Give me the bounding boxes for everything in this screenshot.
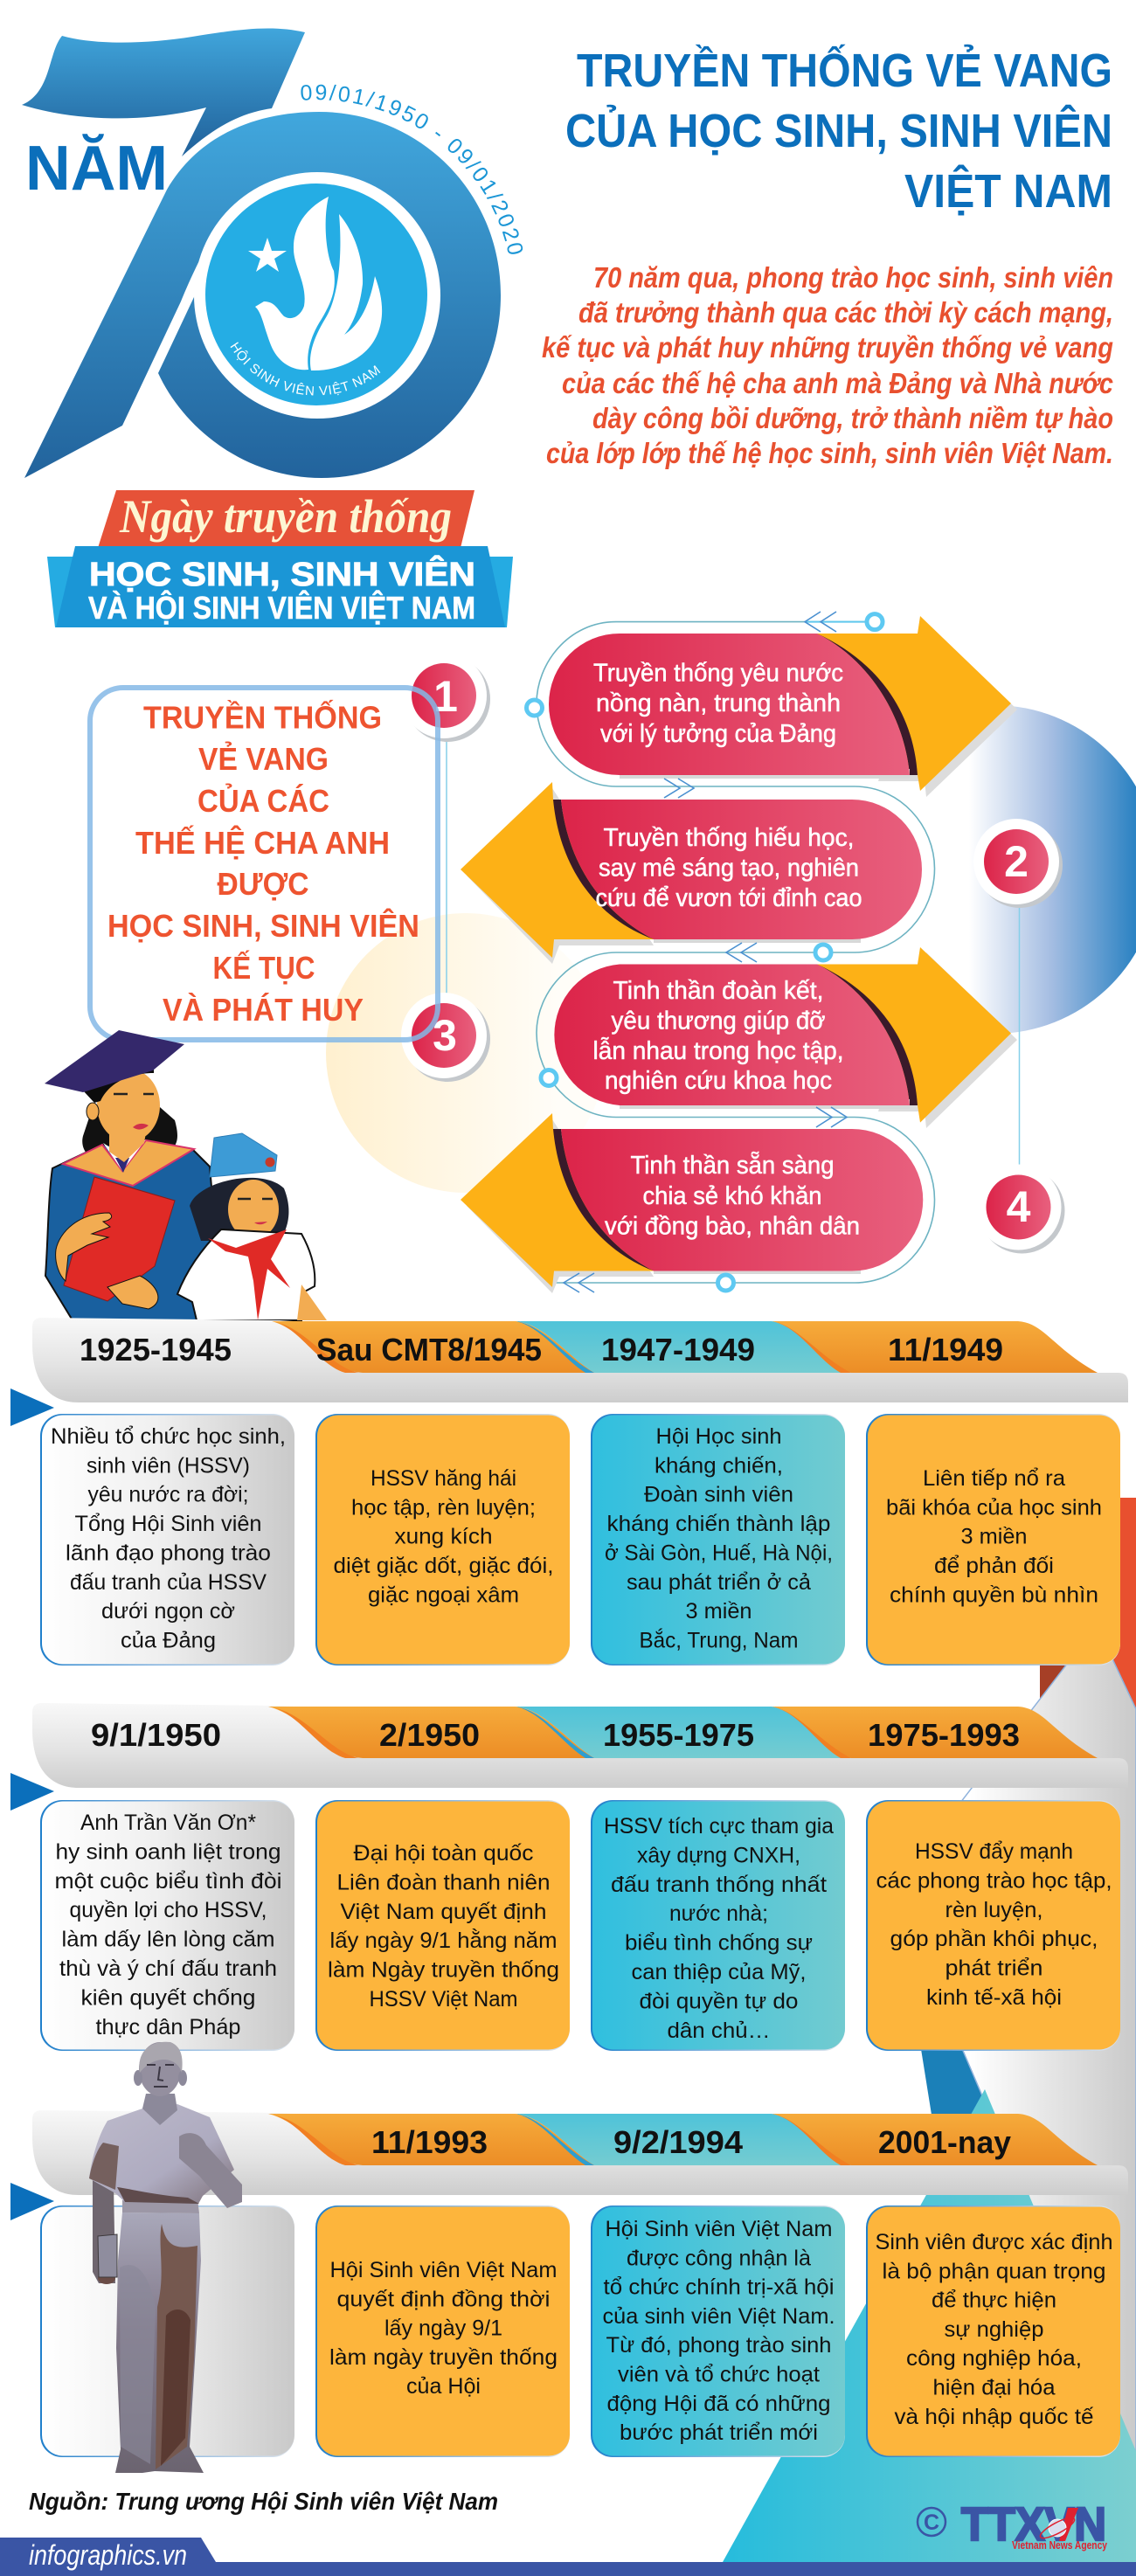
statue of Trần Văn Ơn <box>89 2042 242 2473</box>
year labels: Sau CMT8/1945 <box>316 1332 542 1368</box>
year labels: 2/1950 <box>379 1717 480 1753</box>
pill <box>561 800 922 939</box>
digit 0 ring with 7 diagonal <box>24 112 501 478</box>
tab: orange 3 <box>772 1707 1098 1758</box>
card: 9/2/1994: Từ đó, phong trào sinh <box>606 2333 832 2358</box>
card: 1975-1993: kinh tế-xã hội <box>926 1985 1062 2010</box>
card: 1947-1949: 3 miền <box>685 1599 752 1624</box>
pill text <box>593 659 843 748</box>
card: 1955-1975: biểu tình chống sự <box>625 1931 813 1956</box>
neck <box>142 2094 177 2125</box>
text box: traditions heading: CỦA CÁC <box>197 782 329 819</box>
graduate neck and face <box>109 1127 147 1162</box>
red book <box>64 1177 175 1301</box>
flow outline <box>537 622 935 1283</box>
tab edge slivers <box>268 2114 851 2165</box>
heading box outline <box>90 688 438 1040</box>
card: after August Revolution: giặc ngoại xâm <box>368 1582 519 1607</box>
pale circle behind heading box <box>326 913 606 1193</box>
tab: orange 3 <box>772 2114 1098 2165</box>
icon: white star <box>248 238 287 272</box>
card: 2/1950: Liên đoàn thanh niên <box>337 1870 551 1894</box>
card: 1925-1945: yêu nước ra đời; <box>87 1483 248 1507</box>
card: 2/1950: làm Ngày truyền thống <box>328 1958 559 1983</box>
arrow row 4 <box>461 1113 923 1293</box>
shirt <box>89 2104 234 2204</box>
card: 9/2/1994: viên và tổ chức hoạt <box>618 2363 820 2387</box>
text box: traditions heading: VẺ VANG <box>198 741 329 777</box>
hands <box>56 1213 158 1309</box>
card: 1925-1945: dưới ngọn cờ <box>101 1599 235 1624</box>
card: after August Revolution: diệt giặc dốt, giặc đói, <box>334 1554 554 1578</box>
text box: traditions heading: TRUYỀN THỐNG <box>143 699 382 736</box>
card: portrait background <box>40 2206 294 2457</box>
year labels: 1975-1993 <box>868 1717 1020 1753</box>
arrow row 1 <box>549 616 1017 797</box>
card: 9/1/1950: thù và ý chí đấu tranh <box>59 1956 277 1981</box>
pill shadow <box>620 1099 910 1109</box>
card: 2001-nay: để thực hiện <box>932 2289 1056 2313</box>
ribbon line 2: VÀ HỘI SINH VIÊN VIỆT NAM <box>88 589 475 626</box>
forearm and hand <box>179 2133 242 2208</box>
card: 9/1/1950: hy sinh oanh liệt trong <box>56 1839 281 1864</box>
pill <box>554 965 910 1105</box>
arrow shadow <box>878 622 1017 797</box>
pill text: Truyền thống yêu nước <box>593 659 843 687</box>
icon: dove <box>255 197 335 370</box>
tab edge slivers <box>272 1321 851 1373</box>
year labels: 1955-1975 <box>603 1717 754 1753</box>
card: 11/1993: của Hội <box>406 2374 481 2399</box>
badge 4: 4 <box>1007 1182 1031 1231</box>
card: after August Revolution: học tập, rèn luyện; <box>351 1495 536 1520</box>
text box: traditions heading: KẾ TỤC <box>213 950 315 986</box>
pill text <box>596 824 862 912</box>
pill text: cứu để vươn tới đỉnh cao <box>596 884 862 912</box>
card: 1975-1993: góp phần khôi phục, <box>890 1927 1098 1951</box>
marker arrow 2 <box>10 1773 54 1811</box>
dark crescent <box>553 800 654 939</box>
card: after August Revolution <box>315 1414 570 1665</box>
pill text: chia sẻ khó khăn <box>643 1182 821 1210</box>
card: after August Revolution: HSSV hăng hái <box>371 1466 516 1491</box>
card: 9/1/1950: quyền lợi cho HSSV, <box>70 1898 267 1922</box>
year labels: 9/1/1950 <box>91 1717 221 1753</box>
arrow shadow <box>878 952 1017 1128</box>
copyright mark <box>918 2508 946 2536</box>
gown <box>45 1145 223 1320</box>
hair <box>139 2042 183 2073</box>
card: 9/2/1994: Hội Sinh viên Việt Nam <box>605 2217 832 2241</box>
card: 11/1949: chính quyền bù nhìn <box>890 1582 1098 1607</box>
card: 9/1/1950: làm dấy lên lòng căm <box>61 1928 274 1952</box>
pioneer shirt <box>177 1229 315 1320</box>
card: 1975-1993: các phong trào học tập, <box>876 1868 1112 1893</box>
card: 1947-1949: sau phát triển ở cả <box>627 1570 811 1595</box>
card: 11/1949: Liên tiếp nổ ra <box>923 1466 1065 1491</box>
text box: traditions heading: THẾ HỆ CHA ANH <box>135 824 390 861</box>
year labels: 1947-1949 <box>601 1332 755 1368</box>
timeline band 2 <box>32 1703 1128 1788</box>
dark crescent <box>817 965 918 1105</box>
pill <box>561 1129 923 1271</box>
card: 2001-nay: sự nghiệp <box>944 2317 1043 2342</box>
badge 2: 2 <box>1004 837 1029 886</box>
yellow arrow <box>461 1113 654 1287</box>
card: 1925-1945: Tổng Hội Sinh viên <box>75 1512 262 1536</box>
pioneer cap <box>210 1133 277 1177</box>
pill text: nghiên cứu khoa học <box>605 1067 832 1095</box>
shirt collar and tie <box>103 1139 146 1171</box>
illustration: graduate and pioneer <box>45 1030 327 1320</box>
arrow row 3 <box>554 947 1017 1128</box>
card: 11/1993: Hội Sinh viên Việt Nam <box>330 2258 558 2282</box>
text box: traditions heading: HỌC SINH, SINH VIÊN <box>107 907 419 944</box>
card: 1955-1975: HSSV tích cực tham gia <box>604 1814 834 1839</box>
card: 9/1/1950 <box>40 1800 294 2051</box>
footer band <box>0 2538 1136 2576</box>
icon: flame feathers <box>310 214 382 370</box>
yellow arrow <box>461 782 654 958</box>
text box: traditions heading <box>107 699 419 1028</box>
card: 11/1993: quyết định đồng thời <box>337 2287 551 2311</box>
card: 2001-nay: Sinh viên được xác định <box>876 2230 1113 2254</box>
badge 3: 3 <box>433 1011 457 1060</box>
graduate hair back <box>82 1101 177 1160</box>
card: 9/2/1994: của sinh viên Việt Nam. <box>603 2304 835 2329</box>
logo: 70 years emblem <box>22 28 523 478</box>
digit 7 top <box>22 29 305 156</box>
card: 1947-1949: Đoàn sinh viên <box>644 1483 793 1507</box>
card: 9/1/1950: Anh Trần Văn Ơn* <box>80 1811 256 1835</box>
anniversary dates: 09/01/1950 - 09/01/2020 <box>301 84 523 254</box>
card: 1955-1975: can thiệp của Mỹ, <box>631 1960 806 1984</box>
tab: orange 1 <box>272 1321 594 1373</box>
ears <box>134 2070 187 2086</box>
card: 11/1949 <box>866 1414 1120 1665</box>
timeline cards row 1 <box>40 1414 1120 1665</box>
card: 2/1950: lấy ngày 9/1 hằng năm <box>330 1928 558 1953</box>
text box: traditions heading: ĐƯỢC <box>217 866 309 902</box>
ribbon: tradition day <box>47 490 513 627</box>
badge 1: 1 <box>433 672 458 721</box>
card: 2/1950: Đại hội toàn quốc <box>353 1841 533 1866</box>
connector lines <box>447 737 1019 1165</box>
card: 9/1/1950: một cuộc biểu tình đòi <box>54 1869 281 1894</box>
emblem curved name: HỘI SINH VIÊN VIỆT NAM <box>231 342 381 395</box>
yellow arrow <box>817 616 1011 791</box>
card: 11/1993 <box>315 2206 570 2457</box>
card: 1975-1993 <box>866 1800 1120 2051</box>
timeline cards row 2 <box>40 1800 1120 2051</box>
pill <box>549 634 910 775</box>
card: 1925-1945: sinh viên (HSSV) <box>87 1453 250 1478</box>
card: 1947-1949: kháng chiến thành lập <box>606 1512 830 1536</box>
source line: Nguồn: Trung ương Hội Sinh viên Việt Nam <box>29 2488 498 2515</box>
card: 2001-nay: và hội nhập quốc tế <box>895 2405 1094 2429</box>
title <box>565 45 1112 218</box>
white ring <box>194 172 440 419</box>
graduate hair <box>83 1053 154 1103</box>
graduation cap <box>45 1030 184 1092</box>
timeline band 1 <box>32 1318 1128 1402</box>
hand at book <box>98 2272 115 2284</box>
tab: orange 1 <box>268 2114 594 2165</box>
ribbon orange tab <box>98 490 474 548</box>
card: 2/1950: HSSV Việt Nam <box>369 1987 517 2012</box>
pill shadow <box>654 1266 861 1274</box>
card: 9/1/1950: kiên quyết chống <box>80 1985 255 2010</box>
card: 2/1950 <box>315 1800 570 2051</box>
head <box>139 2042 181 2096</box>
marker arrow 1 <box>10 1388 54 1426</box>
card: 9/2/1994: bước phát triển mới <box>620 2420 818 2445</box>
copyright mark: C <box>924 2510 939 2535</box>
background shapes <box>723 1498 1136 2562</box>
card: 11/1949: bãi khóa của học sinh <box>886 1495 1102 1520</box>
text box: traditions heading: VÀ PHÁT HUY <box>163 992 364 1028</box>
card: 1955-1975: dân chủ… <box>668 2019 771 2043</box>
card: 2/1950: Việt Nam quyết định <box>341 1900 547 1924</box>
card: 1975-1993: phát triển <box>946 1956 1043 1981</box>
card: 11/1949: để phản đối <box>934 1554 1054 1578</box>
year labels: 11/1949 <box>888 1332 1003 1368</box>
year labels: 9/2/1994 <box>613 2124 743 2160</box>
card: 1955-1975: nước nhà; <box>669 1901 768 1926</box>
trouser shading <box>120 2224 197 2469</box>
card: 1925-1945 <box>40 1414 294 1665</box>
card: 1947-1949: kháng chiến, <box>655 1453 783 1478</box>
arrow shadow <box>467 788 654 964</box>
ribbon blue front <box>56 546 505 627</box>
card: 1955-1975: xây dựng CNXH, <box>637 1843 800 1867</box>
pioneer hair <box>190 1178 288 1241</box>
card: 1925-1945: Nhiều tổ chức học sinh, <box>51 1424 286 1449</box>
card: 2001-nay: công nghiệp hóa, <box>906 2346 1082 2371</box>
card: 1955-1975: đấu tranh thống nhất <box>611 1873 827 1897</box>
card: 1925-1945: lãnh đạo phong trào <box>66 1541 271 1566</box>
pill shadow <box>654 935 861 943</box>
card: 1947-1949: ở Sài Gòn, Huế, Hà Nội, <box>605 1541 833 1566</box>
card: 9/1/1950: thực dân Pháp <box>96 2015 241 2039</box>
dark crescent <box>817 634 918 775</box>
trousers <box>115 2212 204 2473</box>
shirt waist shadow <box>117 2187 199 2204</box>
year labels: 1925-1945 <box>80 1332 232 1368</box>
card: 1925-1945: đấu tranh của HSSV <box>70 1570 267 1595</box>
card: 11/1993: lấy ngày 9/1 <box>384 2316 502 2341</box>
card: 1955-1975 <box>591 1800 845 2051</box>
card: 1947-1949: Hội Học sinh <box>655 1424 781 1449</box>
footer site name: infographics.vn <box>29 2539 187 2571</box>
agency wordmark: TTXVN <box>961 2498 1106 2551</box>
arrow row 2 <box>461 782 922 964</box>
logo: TTXVN <box>918 2498 1108 2552</box>
dark crescent <box>553 1129 654 1271</box>
year labels <box>91 1717 1020 1753</box>
card: 1925-1945: của Đảng <box>121 1629 216 1653</box>
badge 1 <box>401 653 490 742</box>
ribbon script heading: Ngày truyền thống <box>119 490 452 543</box>
tab: orange 3 <box>772 1321 1098 1373</box>
agency tagline: Vietnam News Agency <box>1012 2538 1108 2552</box>
ribbon line 1: HỌC SINH, SINH VIÊN <box>89 555 475 593</box>
pioneer face <box>228 1180 279 1239</box>
pill text: nồng nàn, trung thành <box>596 689 841 717</box>
timeline cards row 3 <box>40 2206 1120 2457</box>
hood collar <box>63 1140 194 1186</box>
card: 1975-1993: HSSV đẩy mạnh <box>915 1839 1073 1864</box>
arrow shadow <box>467 1119 654 1293</box>
pill text: với đồng bào, nhân dân <box>605 1213 860 1241</box>
orbit <box>1038 2514 1077 2542</box>
pill text: say mê sáng tạo, nghiên <box>599 855 859 883</box>
red V stroke <box>1059 2508 1078 2541</box>
intro paragraph <box>542 261 1113 469</box>
tab: teal <box>516 1707 851 1758</box>
pill text: lẫn nhau trong học tập, <box>592 1036 844 1065</box>
card: 9/2/1994: được công nhận là <box>627 2246 811 2270</box>
belt <box>122 2199 199 2213</box>
pioneer arm <box>297 1285 327 1320</box>
year labels <box>371 2124 1011 2160</box>
card: 9/2/1994 <box>591 2206 845 2457</box>
card: 11/1993: làm ngày truyền thống <box>329 2345 558 2370</box>
pill text: với lý tưởng của Đảng <box>600 720 836 748</box>
card: 1975-1993: rèn luyện, <box>946 1898 1043 1922</box>
pioneer face details <box>238 1199 273 1224</box>
blue disc <box>205 184 427 405</box>
tab: orange 1 <box>268 1707 594 1758</box>
pill shadow <box>620 769 910 779</box>
marker arrow 3 <box>10 2183 54 2220</box>
sleeve shading <box>89 2143 119 2190</box>
timeline band 3 <box>32 2110 1128 2195</box>
yellow arrow <box>817 947 1011 1123</box>
year labels: 2001-nay <box>878 2124 1011 2160</box>
book <box>98 2234 117 2277</box>
blue half disc <box>969 706 1136 1033</box>
card: 2001-nay: là bộ phận quan trọng <box>883 2259 1106 2283</box>
facial features <box>147 2065 174 2087</box>
pill text: Tinh thần đoàn kết, <box>613 977 823 1005</box>
red scarf <box>208 1229 290 1320</box>
word NĂM: NĂM <box>25 134 168 204</box>
card: 1955-1975: đòi quyền tự do <box>640 1989 799 2013</box>
card: after August Revolution: xung kích <box>395 1525 493 1549</box>
card: 9/2/1994: tổ chức chính trị-xã hội <box>603 2275 834 2300</box>
pill text <box>605 1151 860 1241</box>
badge 2 <box>973 819 1063 908</box>
card: 2001-nay: hiện đại hóa <box>933 2375 1056 2399</box>
tab edge slivers <box>268 1707 851 1758</box>
tab: teal <box>516 1321 851 1373</box>
pill text <box>592 977 844 1095</box>
flow nodes and chevrons <box>526 612 883 1292</box>
pill text: Tinh thần sẵn sàng <box>631 1151 834 1180</box>
year labels: 11/1993 <box>371 2124 488 2160</box>
card: 11/1949: 3 miền <box>961 1525 1028 1549</box>
face details <box>87 1094 154 1130</box>
badge 4 <box>975 1164 1064 1253</box>
card: 2001-nay <box>866 2206 1120 2457</box>
card: 1947-1949: Bắc, Trung, Nam <box>640 1627 799 1653</box>
pill text: yêu thương giúp đỡ <box>612 1007 825 1035</box>
card: 1947-1949 <box>591 1414 845 1665</box>
year labels <box>80 1332 1003 1368</box>
left arm <box>93 2178 115 2283</box>
badge 3 <box>401 993 490 1082</box>
title: VIỆT NAM <box>904 164 1112 218</box>
card: 9/2/1994: động Hội đã có những <box>606 2392 830 2416</box>
pill text: Truyền thống hiếu học, <box>603 824 855 852</box>
globe <box>1049 2519 1066 2537</box>
tab: teal <box>516 2114 851 2165</box>
